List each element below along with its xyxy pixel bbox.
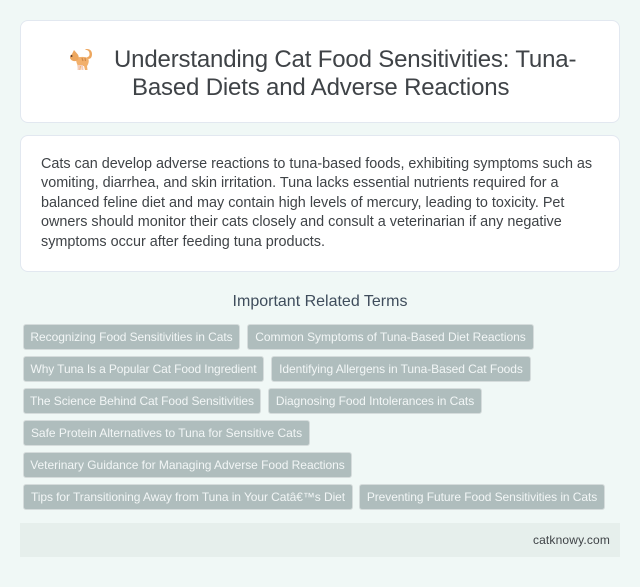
tag: Tips for Transitioning Away from Tuna in Your Catâ€™s Diet: [31, 490, 345, 504]
tag: [23, 484, 353, 510]
tag: Common Symptoms of Tuna-Based Diet Reactions: [255, 330, 526, 344]
tag: [23, 420, 310, 446]
tag: [271, 356, 531, 382]
tag: Why Tuna Is a Popular Cat Food Ingredient: [31, 362, 256, 376]
description text: Cats can develop adverse reactions to tuna-based foods, exhibiting symptoms such as: [41, 156, 592, 172]
tag: Diagnosing Food Intolerances in Cats: [276, 394, 474, 408]
description text: balanced feline diet and may contain high levels of mercury, leading to toxicity. Pet: [41, 195, 564, 211]
heading: Understanding Cat Food Sensitivities: Tuna-: [114, 46, 576, 73]
tag: [23, 356, 264, 382]
tag: [23, 452, 352, 478]
tag: [359, 484, 605, 510]
tag: Identifying Allergens in Tuna-Based Cat Foods: [279, 362, 523, 376]
description text: [41, 156, 592, 250]
description text: owners should monitor their cats closely and consult a veterinarian if any negative: [41, 214, 562, 230]
icon: cat: [70, 49, 92, 70]
footer bar: [20, 523, 620, 557]
tag: [23, 324, 240, 350]
tag: Recognizing Food Sensitivities in Cats: [30, 330, 233, 344]
tag: Preventing Future Food Sensitivities in Cats: [367, 490, 597, 504]
tag: [247, 324, 534, 350]
description text: vomiting, diarrhea, and skin irritation. Tuna lacks essential nutrients required for a: [41, 175, 559, 191]
tag: Safe Protein Alternatives to Tuna for Sensitive Cats: [31, 426, 302, 440]
tag list: [23, 324, 605, 510]
panel: title card: [20, 20, 620, 123]
heading: Based Diets and Adverse Reactions: [132, 74, 509, 101]
tag: [268, 388, 482, 414]
tag: Veterinary Guidance for Managing Adverse Food Reactions: [30, 458, 345, 472]
description text: symptoms occur after feeding tuna products.: [41, 234, 325, 250]
panel: description: [20, 135, 620, 272]
tag: [23, 388, 261, 414]
tag: The Science Behind Cat Food Sensitivities: [30, 394, 254, 408]
heading: related terms: Important Related Terms: [233, 293, 407, 310]
footer text: catknowy.com: [533, 533, 610, 547]
heading: [114, 46, 576, 101]
